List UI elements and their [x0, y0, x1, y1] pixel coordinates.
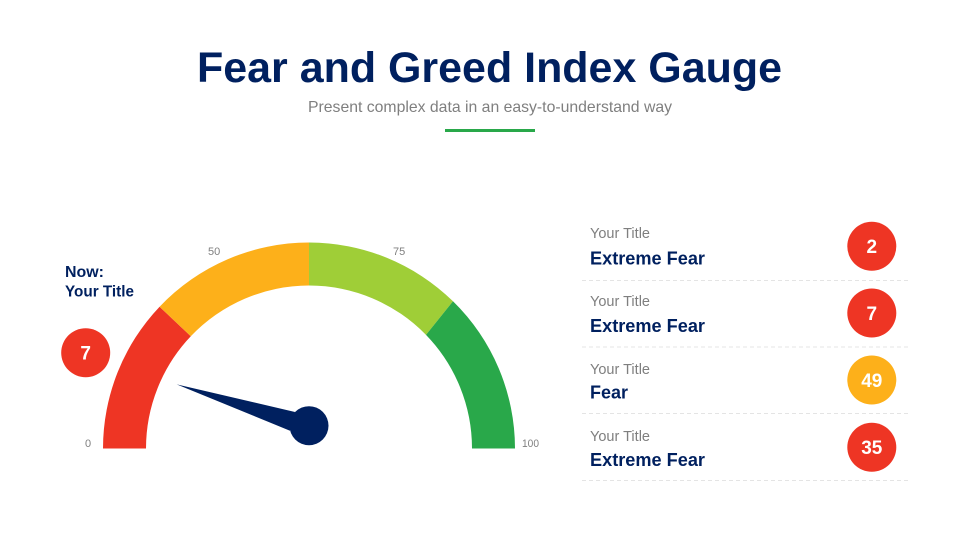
- panel: readings list: [582, 222, 910, 481]
- scale label 75: 75: [393, 246, 405, 258]
- title: Fear and Greed Index Gauge: [197, 44, 782, 92]
- row 4: [582, 423, 910, 480]
- gauge segment: red: [103, 307, 191, 448]
- row 4: Your Title: [590, 429, 650, 445]
- row 2: 7: [867, 304, 877, 325]
- current reading label: Now:: [65, 264, 104, 281]
- gauge segment: orange: [160, 242, 309, 336]
- row 2: Extreme Fear: [590, 316, 705, 336]
- row 1: Your Title: [590, 226, 650, 242]
- title underline: [445, 129, 535, 132]
- row 3: [582, 356, 910, 414]
- current reading label: Your Title: [65, 284, 134, 300]
- row 3: Fear: [590, 382, 628, 402]
- row 3: Your Title: [590, 362, 650, 378]
- scale label 0: 0: [85, 438, 91, 450]
- row 1: Extreme Fear: [590, 248, 705, 268]
- row 1: 2: [867, 237, 877, 258]
- gauge: [85, 242, 539, 450]
- scale label 50: 50: [208, 246, 220, 258]
- gauge segment: green: [426, 301, 515, 448]
- row 2: Your Title: [590, 294, 650, 310]
- row 1: [582, 222, 910, 280]
- scale label 100: 100: [522, 438, 539, 450]
- gauge segment: lime: [309, 242, 453, 335]
- needle: [177, 384, 328, 445]
- row 4: 35: [861, 438, 883, 459]
- current reading badge: 7: [80, 344, 91, 364]
- current reading badge: [61, 328, 110, 377]
- row 4: Extreme Fear: [590, 450, 705, 470]
- current reading label: [65, 264, 134, 300]
- row 2: [582, 288, 910, 347]
- row 3: 49: [861, 371, 882, 392]
- subtitle: Present complex data in an easy-to-understand way: [308, 99, 672, 116]
